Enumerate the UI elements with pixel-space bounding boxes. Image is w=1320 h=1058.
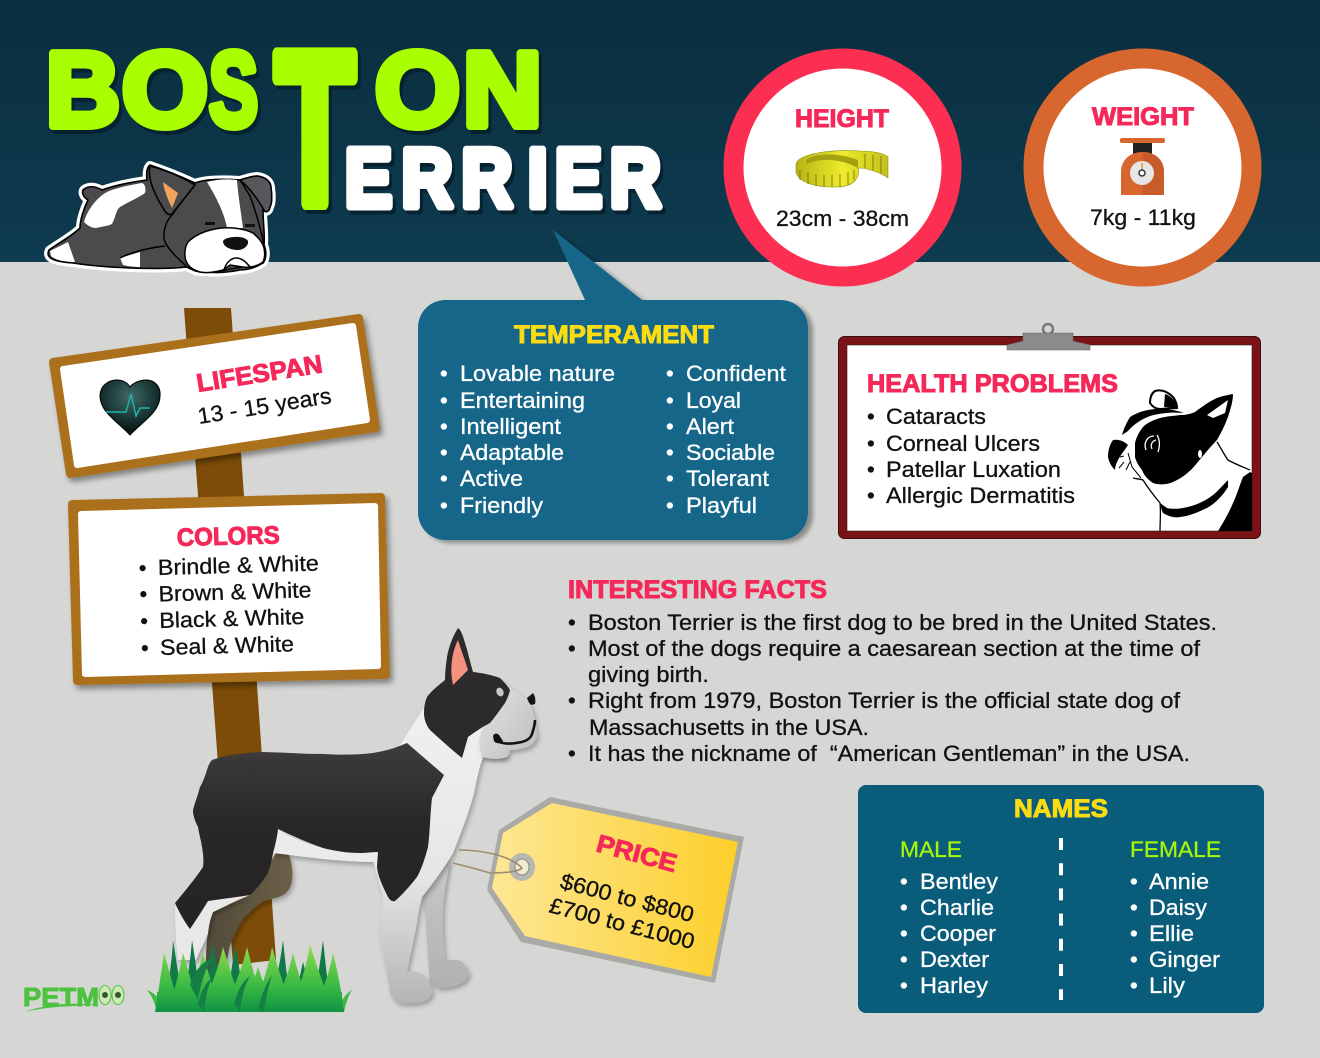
health list: •	[867, 431, 875, 456]
panel: names	[858, 785, 1264, 1013]
temperament list right: •	[666, 414, 674, 439]
title shadow: O	[125, 35, 211, 153]
health list: •	[867, 404, 875, 429]
word: Boston: N	[463, 31, 542, 149]
temperament list right: •	[666, 440, 674, 465]
female names: •	[1130, 973, 1138, 998]
temperament list right	[666, 361, 786, 518]
female names: Ginger	[1149, 947, 1220, 972]
temperament list right: Sociable	[686, 440, 775, 465]
far front leg	[422, 860, 469, 988]
temperament list left: •	[440, 388, 448, 413]
head mask	[1135, 394, 1233, 484]
light blades	[155, 945, 344, 1012]
female names: •	[1130, 869, 1138, 894]
facts list: Right from 1979, Boston Terrier is the official state dog of	[588, 688, 1181, 713]
title: Boston Terrier	[46, 7, 664, 253]
temperament list left: •	[440, 493, 448, 518]
temperament list left: •	[440, 414, 448, 439]
facts list: giving birth.	[588, 662, 709, 687]
brow	[1122, 409, 1184, 435]
chest mass	[1218, 472, 1252, 531]
tag eyelet	[509, 853, 535, 881]
word: Boston: O	[375, 31, 460, 149]
grass	[147, 940, 352, 1012]
dog eye	[495, 686, 505, 698]
icon: measuring tape	[796, 151, 888, 187]
temperament list right: •	[666, 466, 674, 491]
male names: •	[900, 947, 908, 972]
temperament list left: •	[440, 440, 448, 465]
names heading: NAMES	[1014, 795, 1108, 823]
puppy muzzle	[185, 228, 265, 273]
title shadow: ERRIER	[348, 136, 664, 229]
lifespan heading: LIFESPAN	[195, 350, 324, 398]
temperament list right: Alert	[686, 414, 734, 439]
title shadow: T	[278, 11, 358, 253]
facts list: •	[568, 610, 576, 635]
facts list: •	[568, 636, 576, 661]
price values: $600 to $800	[558, 869, 697, 927]
temperament list left: Entertaining	[460, 388, 585, 413]
icon: weighing scale	[1120, 138, 1165, 195]
temperament list right: Playful	[686, 493, 757, 518]
puppy far ear	[240, 176, 272, 212]
colors list	[138, 551, 321, 660]
temperament list left	[440, 361, 615, 518]
puppy blaze	[207, 179, 243, 228]
title shadow	[49, 11, 664, 253]
logo: Petmoo: OO	[99, 984, 125, 1009]
dog mouth	[497, 720, 535, 744]
colors list: Seal & White	[160, 631, 294, 660]
icon: heart with pulse	[100, 380, 160, 435]
price values	[547, 869, 697, 954]
side blades	[147, 990, 352, 1012]
temperament list left: •	[440, 466, 448, 491]
facts list	[568, 610, 1217, 766]
price tag	[453, 797, 744, 983]
height label: HEIGHT	[795, 105, 889, 133]
panel: colors sign	[72, 497, 386, 681]
panel: temperament speech bubble	[418, 230, 808, 540]
male names: Harley	[920, 973, 988, 998]
temperament list right: •	[666, 361, 674, 386]
male names: •	[900, 973, 908, 998]
logo: Petmoo: PETM	[23, 982, 99, 1012]
weight label: WEIGHT	[1092, 103, 1194, 131]
belly	[273, 829, 378, 862]
female names: Ellie	[1149, 921, 1194, 946]
word: Terrier: ERRIER	[345, 132, 661, 225]
health list	[867, 404, 1075, 508]
illustration: standing Boston terrier	[175, 628, 537, 1003]
interesting facts	[568, 576, 1217, 766]
height value: 23cm - 38cm	[776, 206, 909, 231]
neck lines	[1133, 442, 1250, 531]
male names: •	[900, 895, 908, 920]
female names: •	[1130, 947, 1138, 972]
dog white body	[175, 690, 507, 1003]
colors list: Black & White	[159, 604, 305, 633]
colors list: Brindle & White	[157, 551, 319, 580]
male names: Bentley	[920, 869, 998, 894]
temperament list left: Active	[460, 466, 523, 491]
tag string	[453, 850, 522, 873]
hind foot	[175, 895, 250, 960]
puppy head	[164, 179, 264, 272]
health heading: HEALTH PROBLEMS	[867, 370, 1118, 398]
facts list: •	[568, 688, 576, 713]
title shadow: B	[49, 35, 123, 153]
female names: FEMALE	[1130, 837, 1221, 862]
title shadow: O	[378, 35, 463, 153]
word: Boston: S	[209, 31, 258, 149]
temperament list left: •	[440, 361, 448, 386]
weight value: 7kg - 11kg	[1090, 205, 1196, 230]
eye arcs	[1145, 435, 1159, 452]
female names: •	[1130, 921, 1138, 946]
signpost pole	[184, 308, 276, 965]
male names: Dexter	[920, 947, 989, 972]
illustration: terrier head	[1108, 390, 1252, 531]
word: Boston: B	[46, 31, 120, 149]
word: Boston: T	[275, 7, 355, 249]
dog lip	[493, 734, 503, 743]
puppy leg line	[120, 246, 165, 258]
temperament list right: Loyal	[686, 388, 741, 413]
male names: Charlie	[920, 895, 994, 920]
health list: Corneal Ulcers	[886, 431, 1040, 456]
temperament list left: Intelligent	[460, 414, 561, 439]
word: Boston: O	[122, 31, 208, 149]
panel: lifespan sign	[53, 318, 376, 474]
health list: Allergic Dermatitis	[886, 483, 1075, 508]
facts list: •	[568, 741, 576, 766]
price heading: PRICE	[593, 830, 680, 878]
male names: MALE	[900, 837, 962, 862]
ear inner	[1207, 400, 1228, 418]
far hind leg	[205, 853, 292, 985]
facts list: Most of the dogs require a caesarean section at the time of	[588, 636, 1201, 661]
front dark blades	[190, 958, 272, 1012]
weight badge	[1024, 48, 1262, 286]
temperament list right: •	[666, 493, 674, 518]
temperament list left: Friendly	[460, 493, 543, 518]
female names: Lily	[1149, 973, 1185, 998]
puppy ear inner	[163, 182, 178, 208]
lifespan value: 13 - 15 years	[196, 383, 333, 429]
female names	[1130, 837, 1221, 998]
column divider	[1059, 838, 1063, 1000]
word: Boston	[46, 7, 542, 249]
female names: Daisy	[1149, 895, 1207, 920]
title shadow: N	[466, 35, 545, 153]
female names: Annie	[1149, 869, 1209, 894]
colors list: •	[138, 555, 147, 581]
puppy nose and eyes	[205, 222, 255, 250]
male names: •	[900, 869, 908, 894]
title shadow: S	[212, 35, 261, 153]
collar	[1160, 480, 1228, 517]
female names: •	[1130, 895, 1138, 920]
muzzle spot	[1108, 440, 1128, 470]
male names: •	[900, 921, 908, 946]
health list: Cataracts	[886, 404, 986, 429]
muzzle lines	[1119, 453, 1141, 478]
facts heading: INTERESTING FACTS	[568, 576, 827, 604]
colors list: •	[140, 608, 148, 634]
temperament list right: Tolerant	[686, 466, 769, 491]
temperament list right: Confident	[686, 361, 786, 386]
puppy mouth	[224, 258, 250, 270]
facts list: It has the nickname of “American Gentleman” in the USA.	[588, 741, 1190, 766]
colors list: Brown & White	[158, 577, 312, 606]
temperament list left: Adaptable	[460, 440, 564, 465]
temperament list left: Lovable nature	[460, 361, 615, 386]
logo eyes	[99, 986, 124, 1004]
header band	[0, 0, 1320, 262]
dog nose	[527, 693, 535, 705]
top ear	[1150, 390, 1177, 409]
colors list: •	[141, 635, 149, 660]
male names: Cooper	[920, 921, 996, 946]
health list: •	[867, 483, 875, 508]
height badge	[724, 48, 962, 286]
dog ear inner	[451, 640, 468, 685]
temperament heading: TEMPERAMENT	[514, 321, 714, 349]
facts list: Boston Terrier is the first dog to be bred in the United States.	[588, 610, 1217, 635]
temperament list right: •	[666, 388, 674, 413]
icon: clipboard clip	[1007, 324, 1090, 350]
panel: health problems clipboard	[838, 324, 1260, 538]
puppy left ear	[149, 166, 195, 215]
dog black body	[175, 743, 444, 929]
dog muzzle	[479, 677, 537, 759]
price values: £700 to £1000	[547, 893, 697, 954]
male names	[900, 837, 998, 998]
puppy back patches	[50, 183, 145, 267]
dog black head	[424, 628, 510, 758]
colors list: •	[139, 581, 148, 607]
colors heading: COLORS	[176, 521, 280, 552]
back dark blades	[165, 940, 330, 1000]
facts list: Massachusetts in the USA.	[589, 715, 869, 740]
neck chest and near front leg	[373, 690, 507, 1003]
health list: •	[867, 457, 875, 482]
health list: Patellar Luxation	[886, 457, 1061, 482]
icon: sleeping puppy	[48, 165, 272, 273]
